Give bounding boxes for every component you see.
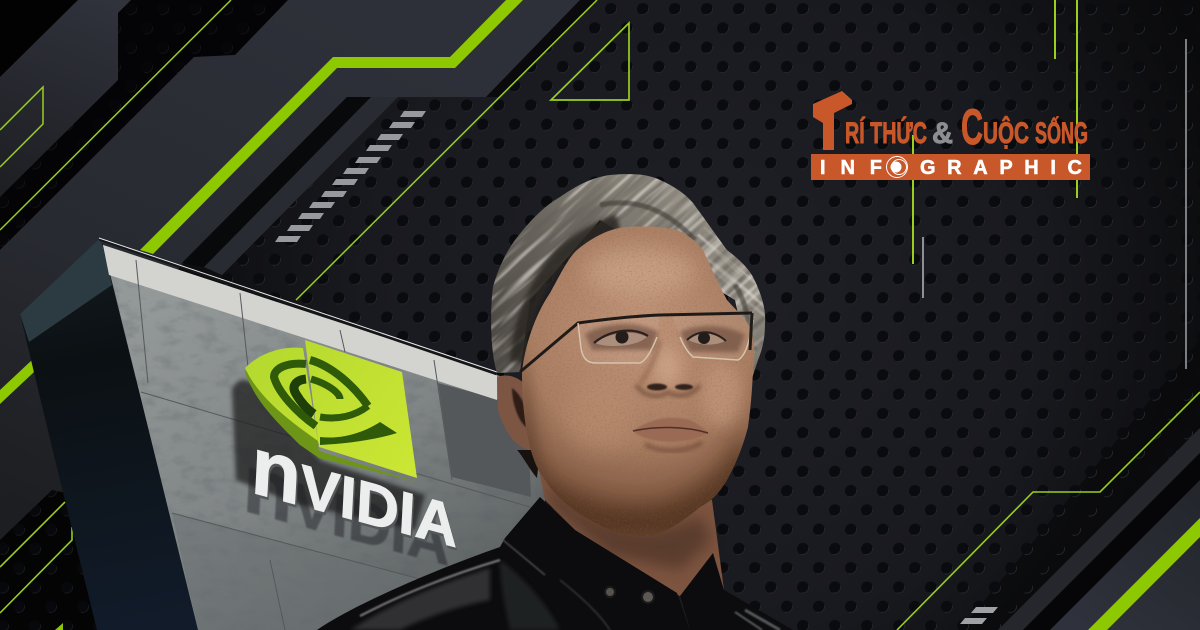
glasses lenses [578,314,753,363]
hair under ear [517,450,540,478]
black diagonal band [1023,453,1200,630]
jacket gloss [350,560,560,630]
tile seams [136,260,540,630]
stone mottling [112,276,436,510]
logo right block [305,340,417,478]
dark hair sweep at the temple [518,222,618,362]
Nvidia eye logo [245,340,417,482]
panel: central slate band [0,0,580,540]
NVIDIA sign letters: nVIDIA [250,422,462,569]
banner O swirl icon [886,156,908,178]
dark roof edge [99,239,497,374]
logo tail [320,422,397,445]
glasses right hinge [750,313,752,350]
eyeglasses [520,313,753,372]
logo wordmark: SỐNG [1035,116,1088,150]
darker stone tile [438,383,531,497]
inner ear shadow [512,388,528,428]
side face lit top [20,239,112,342]
thick green accent lower-left [0,360,34,404]
right upper lid [687,332,726,341]
glasses lower rims [578,323,657,363]
forehead light [585,248,695,296]
logo T mark [813,91,852,150]
slate strip under the dashes [204,97,398,275]
left iris [616,330,628,344]
mouth [633,418,708,451]
gray dash ladder [275,111,426,242]
small green triangle bottom left [55,623,63,630]
right iris [698,332,710,344]
building with Nvidia sign [20,238,550,630]
hair mass [491,174,766,376]
building stone front [103,245,545,630]
thin green lines lower left [0,502,72,613]
thin vertical lines top right [912,0,1187,369]
lower jaw shadow [541,432,746,536]
logo wordmark: RÍ THỨC [845,116,927,150]
leather jacket [317,497,793,630]
thin green circuit line [897,392,1200,630]
left eye white [595,333,647,346]
lower right corner decoration [897,392,1200,630]
face shading [515,220,760,540]
neck [535,450,740,630]
left upper lid [594,331,648,343]
hair sweep mid tones [600,203,750,345]
logo extrusion [245,352,417,482]
black strip beside the central panel [182,97,371,267]
logo left half [245,348,318,441]
logo: Tri Thuc & Cuoc Song Infographic [811,91,1090,180]
nose ridge light [655,348,681,388]
thick green accent line [140,0,523,254]
right cheek light [702,363,742,427]
eye sockets shadow [585,324,745,352]
jacket snap buttons [605,587,615,597]
eyes [594,330,726,346]
man portrait [317,174,792,630]
thick green diagonal [1088,518,1200,630]
building side face [20,239,198,630]
shadow tile under sign [172,513,430,630]
nose shadow and nostrils [636,384,700,396]
sign shadow [232,380,425,530]
logo wordmark: & [932,117,953,150]
banner text: GRAPHIC [920,157,1082,179]
cheek shadow left edge [522,358,546,474]
neck upper shadow [548,482,712,570]
logo spiral [274,360,368,426]
left cheek light [577,417,606,444]
NVIDIA sign letter shadow: nVIDIA [241,437,453,584]
NVIDIA sign letters: nVIDIA [249,419,461,566]
face [522,226,754,536]
hair texture streaks [491,174,766,376]
dark gray diagonal band [998,428,1200,630]
logo banner [811,154,1090,180]
skin grain [535,228,752,536]
black edge band along thin line [486,0,597,97]
nose side shadow [640,340,660,384]
jacket highlights [360,540,780,630]
jacket body [317,497,793,630]
glasses upper frame and arm [520,313,752,372]
gray dashes [960,607,998,624]
right eye white [688,334,725,345]
top-left corner black [0,0,78,77]
green triangle outline [551,23,629,100]
slate corner panel [1050,480,1200,630]
ear [497,375,535,450]
white cornice band [103,245,497,400]
logo wordmark: UỘC [983,116,1029,150]
bright roof line [99,238,497,372]
panel: upper left slate [0,0,131,197]
logo wordmark: C [961,99,983,155]
banner text [820,157,1082,179]
logo wordmark [845,99,1088,155]
banner text: INF [820,157,882,179]
thin green lines top left [0,0,597,300]
